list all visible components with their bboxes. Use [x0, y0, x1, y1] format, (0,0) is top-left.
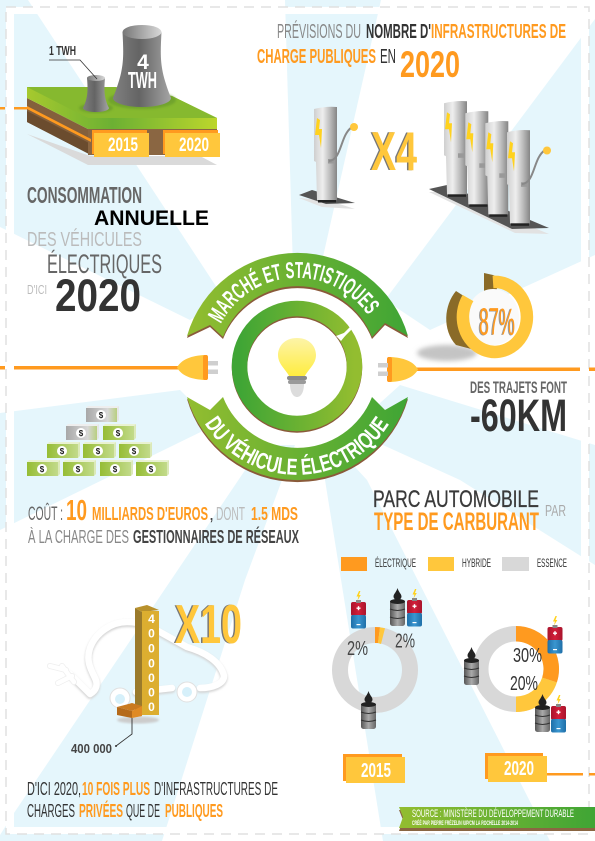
icon: pyramid of banknotes: [27, 406, 169, 476]
top ribbon: marché et statistiques: MARCHÉ ET STATISTIQUES: [208, 262, 380, 324]
tag: 2015: 2015: [361, 760, 391, 782]
text: coût: MILLIARDS D'EUROS: [92, 504, 208, 524]
x10 label: X10: [175, 593, 242, 655]
chart: bar 4 000 000 vs 400 000: 0: [148, 686, 155, 700]
text: d'ici 2020: [27, 779, 278, 821]
icon: pyramid of banknotes: $: [113, 465, 118, 474]
heading: consommation annuelle: 2020: [55, 270, 141, 321]
tag: 2020: [485, 753, 547, 782]
ring: [240, 308, 354, 425]
source ribbon: [399, 807, 595, 831]
text: d'ici 2020: D'INFRASTRUCTURES DE: [154, 779, 278, 799]
chart: 87% donut: [417, 273, 527, 361]
heading: consommation annuelle: DES VÉHICULES: [27, 228, 142, 251]
chart: bar 4 000 000 vs 400 000: 0: [148, 626, 155, 640]
text: coût: GESTIONNAIRES DE RÉSEAUX: [133, 526, 299, 547]
callout: 400 000: [71, 718, 132, 756]
chart: bar 4 000 000 vs 400 000: 0: [148, 642, 155, 656]
icon: pyramid of banknotes: $: [99, 411, 104, 420]
icon: single charging station: [299, 107, 358, 209]
heading: prévisions infrastructures: [257, 20, 566, 85]
icon: pyramid of banknotes: $: [116, 429, 121, 438]
x10 label: [174, 593, 242, 655]
text: coût: [28, 495, 299, 547]
chart: donut 2015: 2%: [395, 630, 415, 652]
icon: pyramid of banknotes: $: [40, 465, 45, 474]
text: d'ici 2020: PUBLIQUES: [165, 801, 223, 821]
text: coût: ,: [209, 504, 214, 524]
big cooling tower: 4: [137, 51, 149, 74]
icon: pyramid of banknotes: $: [60, 447, 65, 456]
heading: parc automobile: PARC AUTOMOBILE: [373, 486, 539, 513]
chart: donut 2020: 30%: [513, 645, 542, 667]
illustration: power plant on ground block: [27, 25, 220, 165]
icon: pyramid of banknotes: $: [149, 465, 154, 474]
heading: prévisions infrastructures: 2020: [400, 44, 460, 85]
icon: pyramid of banknotes: $: [76, 465, 81, 474]
small cooling tower: [83, 75, 109, 112]
heading: consommation annuelle: [27, 182, 209, 321]
heading: consommation annuelle: CONSOMMATION: [27, 182, 142, 208]
chart: donut 2020: 20%: [510, 673, 538, 695]
callout: 400 000: 400 000: [71, 741, 112, 756]
text: d'ici 2020: D'ICI 2020,: [27, 779, 81, 799]
x10 label: X10: [174, 593, 240, 655]
text: d'ici 2020: PRIVÉES: [79, 800, 123, 821]
icon: pyramid of banknotes: $: [96, 447, 101, 456]
heading: prévisions infrastructures: NOMBRE D': [366, 21, 431, 43]
x4 label: X4: [371, 120, 417, 182]
connector lines: [0, 107, 595, 776]
text: coût: COÛT :: [28, 503, 63, 525]
tag: 2020: 2020: [504, 758, 534, 780]
heading: consommation annuelle: ÉLECTRIQUES: [47, 249, 162, 279]
legend: ESSENCE: [537, 556, 567, 570]
icon: light bulb: [278, 338, 316, 397]
1 TWH label: [49, 43, 97, 79]
text: d'ici 2020: CHARGES: [27, 801, 75, 821]
tag 2020: [163, 130, 220, 157]
heading: parc automobile: PAR: [545, 503, 566, 520]
heading: prévisions infrastructures: PRÉVISIONS DU: [277, 20, 361, 43]
icon: right plug: [378, 357, 418, 382]
icon: white electric car outline: [50, 622, 224, 708]
tag 2015: [92, 130, 149, 157]
top ribbon: marché et statistiques: [187, 252, 408, 339]
tag: 2015: [343, 754, 405, 783]
legend: HYBRIDE: [462, 556, 491, 570]
chart: bar 4 000 000 vs 400 000: 0: [148, 671, 155, 685]
chart: 87% donut: 87%: [479, 302, 515, 344]
chart: bar 4 000 000 vs 400 000: 4: [148, 612, 155, 626]
text: coût: 10: [66, 495, 87, 527]
icon: left plug: [177, 355, 218, 380]
legend: [341, 555, 567, 571]
big cooling tower: [113, 25, 171, 107]
chart: donut 2020: [481, 634, 551, 704]
chart: bar 4 000 000 vs 400 000: [117, 605, 159, 724]
tag 2015: 2015: [108, 135, 138, 156]
tag 2020: 2020: [179, 135, 209, 156]
heading: prévisions infrastructures: EN: [380, 46, 396, 68]
heading: consommation annuelle: D'ICI: [27, 282, 47, 297]
heading: parc automobile: [373, 486, 566, 536]
text: d'ici 2020: QUE DE: [126, 801, 160, 821]
bottom ribbon: du véhicule électrique: DU VÉHICULE ÉLECTRIQUE: [205, 415, 389, 475]
chart: 87% donut: 87%: [478, 302, 514, 344]
heading: consommation annuelle: ANNUELLE: [94, 207, 209, 230]
text: des trajets font -60km: [470, 378, 567, 441]
chart: bar 4 000 000 vs 400 000: 0: [148, 656, 155, 670]
icon: pyramid of banknotes: $: [132, 447, 137, 456]
legend: ÉLECTRIQUE: [375, 555, 416, 570]
big cooling tower: TWH: [128, 67, 157, 93]
icon: pyramid of banknotes: $: [79, 429, 84, 438]
chart: bar 4 000 000 vs 400 000: 0: [148, 700, 155, 714]
chart: donut 2015: 2%: [347, 638, 368, 660]
central emblem: [177, 252, 418, 482]
text: coût: DONT: [216, 504, 245, 524]
text: coût: À LA CHARGE DES: [28, 527, 129, 547]
heading: prévisions infrastructures: CHARGE PUBLIQUES: [257, 46, 376, 68]
icon: four charging stations: [429, 101, 551, 234]
text: d'ici 2020: 10 FOIS PLUS: [82, 779, 150, 799]
x4 label: X4: [370, 120, 416, 182]
1 TWH label: 1 TWH: [49, 43, 76, 58]
chart: donut 2015: [340, 627, 415, 705]
text: coût: 1.5 MDS: [251, 504, 298, 524]
icons: batteries and fuel barrels: [351, 588, 566, 732]
